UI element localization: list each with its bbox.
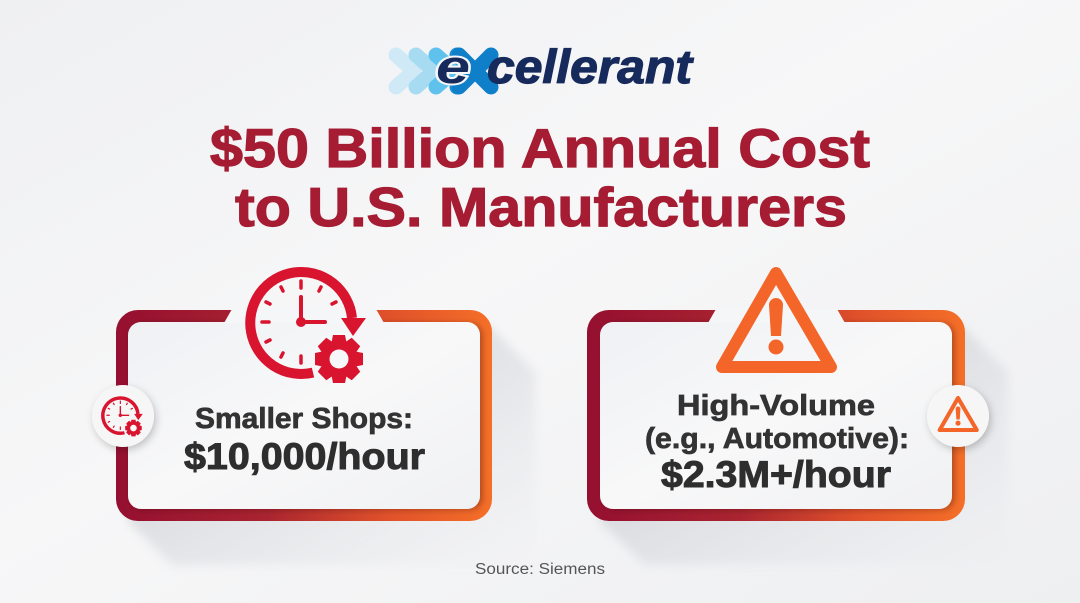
card panel — [128, 322, 480, 509]
title: $50 Billion Annual Cost — [210, 117, 870, 179]
title: to U.S. Manufacturers — [235, 176, 847, 238]
icon: clock with gear — [250, 272, 373, 393]
card shadow — [596, 325, 1008, 565]
logo wordmark: cellerant — [487, 40, 694, 93]
text: smaller shops: Smaller Shops: — [195, 403, 413, 435]
logo: excellerant — [396, 40, 694, 93]
title — [210, 117, 870, 238]
text: 2.3M per hour: $2.3M+/hour — [661, 454, 891, 495]
card frame — [116, 310, 492, 521]
logo chevrons — [396, 55, 491, 87]
logo wordmark: e — [436, 40, 470, 93]
text: high-volume: High-Volume — [677, 390, 875, 422]
panel: smaller shops — [92, 272, 535, 565]
badge: small clock — [92, 385, 154, 447]
card frame — [587, 310, 965, 521]
panel: high-volume — [587, 273, 1008, 565]
text: automotive: (e.g., Automotive): — [645, 423, 909, 455]
logo wordmark: x — [464, 48, 488, 92]
card panel — [600, 322, 952, 509]
icon: warning triangle — [722, 273, 831, 367]
card shadow — [125, 325, 535, 565]
badge: small warning — [927, 385, 989, 447]
source note: Source: Siemens — [475, 561, 605, 578]
text: 10,000 per hour: $10,000/hour — [184, 436, 425, 477]
